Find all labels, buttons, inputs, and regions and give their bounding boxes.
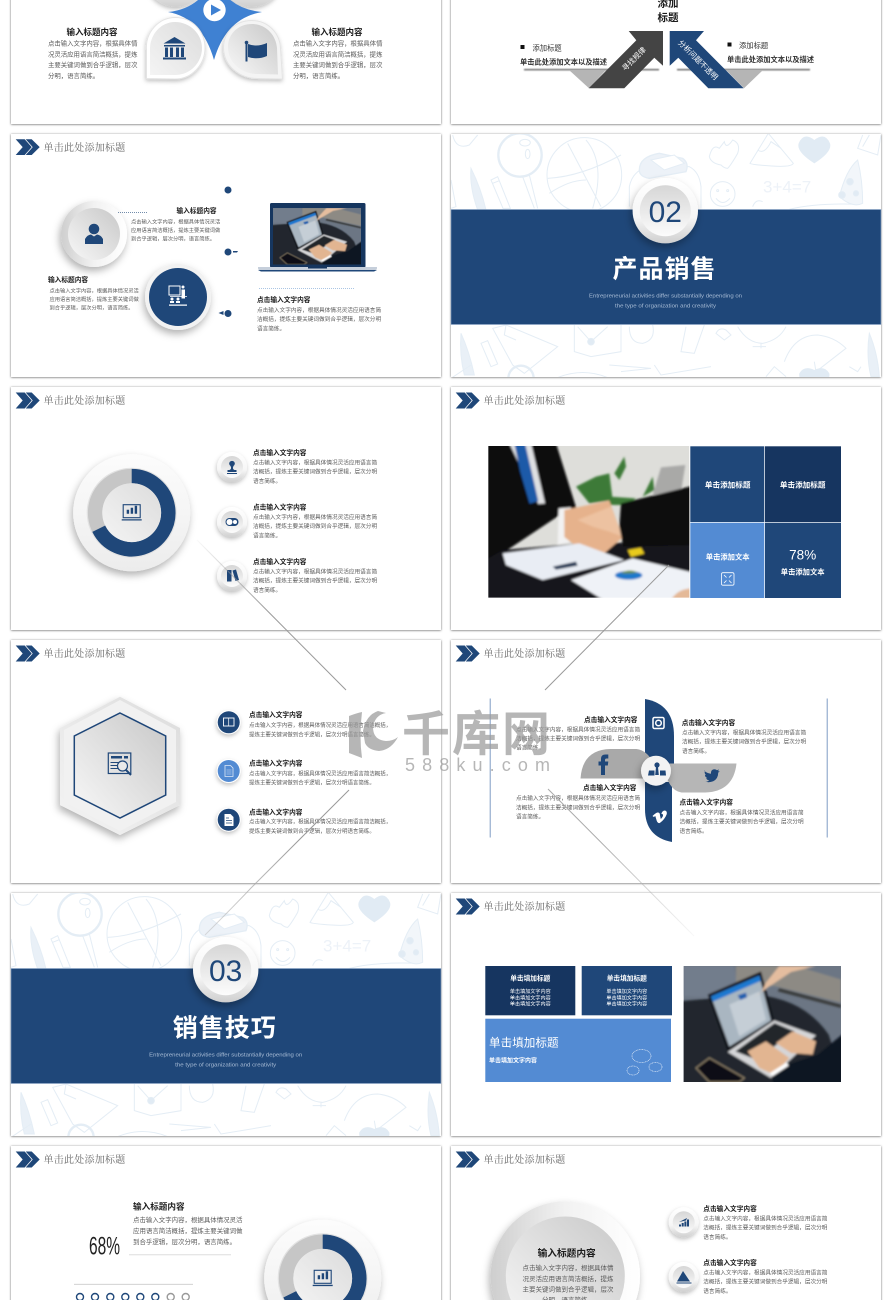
list item 3: 提炼主要关键词做到合乎逻辑，层次分明语言简练。 [249,827,375,835]
top blue blade [645,699,674,770]
list item 1: 点击输入文字内容 [253,448,307,457]
list item 1 [217,710,391,738]
list item 1: 洁概括，提炼主要关键词做到合乎逻辑，层次分明 [253,467,377,475]
tile: left: 单击填加标题 [510,973,551,982]
list item 3: 点击输入文字内容 [249,808,303,817]
list item 3: 点击输入文字内容，根据具体情况灵活应用语言简 [253,567,377,575]
icon: play button [203,0,226,21]
tile: right: 单击填加文字内容 [606,994,647,1001]
tile: wide blue [485,1019,671,1082]
text block: top: 到合乎逻辑，层次分明，语言简练。 [131,234,215,242]
stat: 68 percent: 68% [89,1232,120,1260]
text block: lower right: 点击输入文字内容 [257,295,311,304]
text block: arrow right: 添加标题 [739,41,769,50]
text block: left: 应用语言简洁概括，提炼主要关键词做 [50,295,139,303]
list item 3: 点击输入文字内容 [253,557,307,566]
text block: bottom left: 点击输入文字内容，根据具体情况灵活应用语言简 [516,794,640,802]
icon: blue star [168,0,262,60]
list item 3 [217,557,377,594]
icon: bank petal [146,17,205,79]
text block: bottom left [516,783,640,820]
text block: lower right: 洁概括，提炼主要关键词做到合乎逻辑，层次分明 [257,315,381,323]
big circle: 主要关键词做到合乎逻辑，层次 [522,1284,614,1293]
big circle: 点击输入文字内容，根据具体情 [522,1263,614,1272]
list item 1: 点击输入文字内容，根据具体情况灵活应用语言简 [703,1214,828,1222]
icon: vimeo [652,810,667,823]
text block: top right: 点击输入文字内容 [682,718,736,727]
tile: right: 单击填加标题 [607,973,647,982]
tile: left [485,966,575,1015]
panel: handshake tiles [451,387,881,630]
panel: four petal diagram [145,0,283,79]
icon: header chevrons [16,139,40,155]
list item 1: 语言简练。 [253,477,281,485]
icon: header chevrons [456,1152,480,1168]
chart: double arrow [524,31,810,88]
heading: 单击此处添加标题 [484,1153,566,1166]
list item 2: 点击输入文字内容，根据具体情况灵活应用语言简洁概括， [249,769,391,777]
text block: bottom right: 点击输入文字内容，根据具体情况灵活应用语言简 [680,808,804,816]
photo: laptop [684,966,841,1082]
text block: 输入标题内容 [133,1200,185,1211]
big circle: 况灵活应用语言简洁概括，提炼 [522,1274,614,1283]
hexagon [60,697,180,835]
arrow label: right: 分析问题不透明 [676,38,720,82]
text block: right petal copy [293,27,383,80]
list item 1 [669,1204,828,1241]
list item 2: 洁概括，提炼主要关键词做到合乎逻辑，层次分明 [253,522,377,530]
text block: right petal copy: 点击输入文字内容，根据具体情 [293,38,383,47]
text block: left petal copy: 主要关键词做到合乎逻辑，层次 [48,60,138,69]
tile: title 2: 单击添加标题 [780,479,826,489]
text block: right petal copy: 况灵活应用语言简洁概括，提炼 [293,49,383,58]
center badge [641,756,671,786]
list item 1: 洁概括，提炼主要关键词做到合乎逻辑，层次分明 [703,1223,828,1231]
subtitle [589,293,742,309]
icon: header chevrons [456,392,480,408]
text block: bottom right: 语言简练。 [680,827,708,835]
icon: training button [145,264,211,330]
text block: arrow left: 单击此处添加文本以及描述 [520,57,608,66]
icon: header chevrons [16,392,40,408]
icon: header chevrons [16,1152,40,1168]
tile: right [582,966,672,1015]
pinwheel [580,699,736,842]
list item 1: 点击输入文字内容 [249,710,303,719]
text block: top left: 洁概括，提炼主要关键词做到合乎逻辑，层次分明 [516,734,640,742]
background doodles [11,892,441,1150]
list item 3: 洁概括，提炼主要关键词做到合乎逻辑，层次分明 [253,576,377,584]
text block: bottom left: 点击输入文字内容 [583,783,637,792]
text block: top right: 洁概括，提炼主要关键词做到合乎逻辑，层次分明 [682,737,806,745]
subtitle: Entrepreneurial activities differ substantially depending on [589,293,742,299]
panel: slide background top left [11,0,441,124]
text block: top: 输入标题内容 [176,206,217,215]
list item 1 [217,448,377,485]
heading: 单击此处添加标题 [44,394,126,407]
list item 2: 洁概括，提炼主要关键词做到合乎逻辑，层次分明 [703,1277,828,1285]
watermark logo [349,708,552,775]
icon: person button [61,201,127,267]
tile: wide blue: 单击填加标题 [489,1035,559,1049]
list item 2: 点击输入文字内容，根据具体情况灵活应用语言简 [703,1269,828,1277]
band [11,968,441,1084]
panel: tiles with photo [451,893,881,1136]
donut chart [264,1220,381,1300]
text block: left petal copy: 输入标题内容 [66,27,118,37]
text block: left: 点击输入文字内容，根据具体情况灵活 [50,286,139,294]
list item 2: 点击输入文字内容，根据具体情况灵活应用语言简 [253,513,377,521]
list item 2: 点击输入文字内容 [253,502,307,511]
tile: left: 单击填加文字内容 [510,1000,551,1007]
text block: bottom right: 洁概括，提炼主要关键词做到合乎逻辑，层次分明 [680,817,804,825]
tile: 78 percent: 单击添加文本 [781,568,825,577]
heading: 单击此处添加标题 [484,394,566,407]
subtitle: Entrepreneurial activities differ substantially depending on [149,1052,302,1058]
text block: left petal copy: 点击输入文字内容，根据具体情 [48,38,138,47]
text block: left [48,275,139,311]
list item 2 [217,502,377,539]
heading: 单击此处添加标题 [44,141,126,154]
text block: top left: 点击输入文字内容 [584,715,638,724]
icon: header chevrons [456,898,480,914]
panel: percentage slide [11,1146,441,1300]
icon: facebook [598,754,608,775]
list item 2: 点击输入文字内容 [703,1258,757,1267]
number badge: 03 [209,955,242,988]
watermark name: 千库网 [402,708,552,761]
tile: title 1 [690,446,764,522]
text block: arrow right [727,41,815,64]
icon: instagram [653,718,664,728]
dot rating [76,1294,189,1300]
text block [133,1200,243,1246]
text block: top [131,206,221,242]
text block: right petal copy: 分明，语言简练。 [293,71,344,80]
arrow: dark [589,31,663,88]
text block: top right: 点击输入文字内容，根据具体情况灵活应用语言简 [682,728,806,736]
text block: bottom left: 洁概括，提炼主要关键词做到合乎逻辑，层次分明 [516,803,640,811]
panel: hexagon list [11,640,441,883]
tile: title 1: 单击添加标题 [705,479,751,489]
text block: arrow left [520,43,608,66]
icon: top petals [145,0,283,7]
text block: top left [516,715,640,751]
text block: top: 点击输入文字内容，根据具体情况灵活 [131,217,221,225]
tile: left: 单击填加文字内容 [510,994,551,1001]
number badge [193,937,258,1002]
big circle: 输入标题内容 [538,1246,596,1259]
heading: arrow slide title: 标题 [658,11,679,24]
text block: lower right: 点击输入文字内容，根据具体情况灵活应用语言简 [257,306,381,314]
bottom blue blade [645,782,672,842]
list item 2: 语言简练。 [253,531,281,539]
list item 3 [217,808,391,835]
connector dots [118,211,147,213]
subtitle: the type of organization and creativity [615,303,716,309]
text block: top: 应用语言简洁概括，提炼主要关键词做 [131,226,221,234]
list item 2: 提炼主要关键词做到合乎逻辑，层次分明语言简练。 [249,778,375,786]
panel: section 02 [451,133,881,391]
text block: left petal copy: 况灵活应用语言简洁概括，提炼 [48,49,138,58]
list item 1: 语言简练。 [703,1233,732,1241]
number badge [633,178,698,243]
text block: bottom right: 点击输入文字内容 [680,798,733,807]
text block: arrow right: 单击此处添加文本以及描述 [727,55,815,64]
tile: wide blue: 单击填加文字内容 [489,1056,537,1064]
timeline dots [218,186,238,317]
photo: handshake [488,446,690,598]
icon: header chevrons [456,646,480,662]
tile: left: 单击填加文字内容 [510,988,551,995]
background doodles: 3+4=7 [763,177,811,196]
tile: 78 percent [765,523,841,598]
text block: left petal copy [48,27,138,80]
text block: bottom left: 语言简练。 [516,812,544,820]
list item 2 [217,758,391,786]
donut chart [73,454,190,571]
text block: lower right [257,295,381,332]
illustration: laptop [258,203,377,272]
heading: 单击此处添加标题 [484,900,566,913]
tile: text with icon: 单击添加文本 [706,552,750,561]
text block: 到合乎逻辑，层次分明，语言简练。 [133,1237,236,1246]
text block: left: 输入标题内容 [48,275,88,284]
section title: 销售技巧 [173,1014,277,1042]
text block: 点击输入文字内容，根据具体情况灵活 [133,1215,243,1224]
background doodles [451,133,881,391]
text block: top right [682,718,806,755]
big circle [491,1201,640,1300]
section title: 产品销售 [612,255,717,283]
list item 3: 语言简练。 [253,586,281,594]
watermark url: 588ku.com [405,755,550,775]
list item 1: 点击输入文字内容 [703,1204,757,1213]
watermark icon [349,711,398,758]
text block: left: 到合乎逻辑，层次分明，语言简练。 [50,303,134,311]
side rules [490,698,827,838]
list item 2: 语言简练。 [703,1287,732,1295]
background doodles: 3+4=7 [323,936,371,955]
right grey blade [663,764,736,792]
text block: arrow left: 添加标题 [532,43,562,52]
number badge: 02 [649,196,682,229]
text block: right petal copy: 输入标题内容 [311,27,363,37]
tile: 78 percent: 78% [789,547,816,562]
list item 3: 点击输入文字内容，根据具体情况灵活应用语言简洁概括， [249,818,391,826]
decorative watermark diamond lines [197,540,694,936]
text block: top right: 语言简练。 [682,747,710,755]
icon: twitter [704,769,720,782]
panel: big circle list [451,1146,881,1300]
list item 2: 点击输入文字内容 [249,759,303,768]
left grey blade [580,749,658,778]
text block: right petal copy: 主要关键词做到合乎逻辑，层次 [293,60,383,69]
tile: right: 单击填加文字内容 [606,988,647,995]
text block: top left: 点击输入文字内容，根据具体情况灵活应用语言简 [516,725,640,733]
panel: social pinwheel [451,640,881,883]
band [451,210,881,324]
icon: header chevrons [16,646,40,662]
text block: top left: 语言简练。 [516,743,544,751]
list item 2 [669,1258,828,1295]
panel: section 03 [11,892,441,1150]
panel: slide background top right [451,0,881,124]
subtitle [149,1052,302,1068]
heading: 单击此处添加标题 [44,647,126,660]
tile: title 2 [765,446,841,522]
heading: 单击此处添加标题 [484,647,566,660]
panel: donut with list [11,387,441,630]
heading: 单击此处添加标题 [44,1153,126,1166]
list item 1: 提炼主要关键词做到合乎逻辑，层次分明语言简练。 [249,730,375,738]
text block: 应用语言简洁概括，提炼主要关键词做 [133,1226,243,1235]
panel: laptop timeline slide [11,134,441,377]
tile: text with icon [690,523,764,598]
subtitle: the type of organization and creativity [175,1062,277,1068]
text block: bottom right [680,798,804,835]
list item 1: 点击输入文字内容，根据具体情况灵活应用语言简洁概括， [249,721,391,729]
arrow label: left: 寻找规律 [620,44,648,73]
arrow: blue [670,31,744,88]
list item 1: 点击输入文字内容，根据具体情况灵活应用语言简 [253,458,377,466]
icon: flag petal [224,20,282,79]
text block: lower right: 语言简练。 [257,324,285,332]
text block: left petal copy: 分明，语言简练。 [48,71,99,80]
heading: arrow slide title [658,0,679,24]
tile: right: 单击填加文字内容 [606,1000,647,1007]
